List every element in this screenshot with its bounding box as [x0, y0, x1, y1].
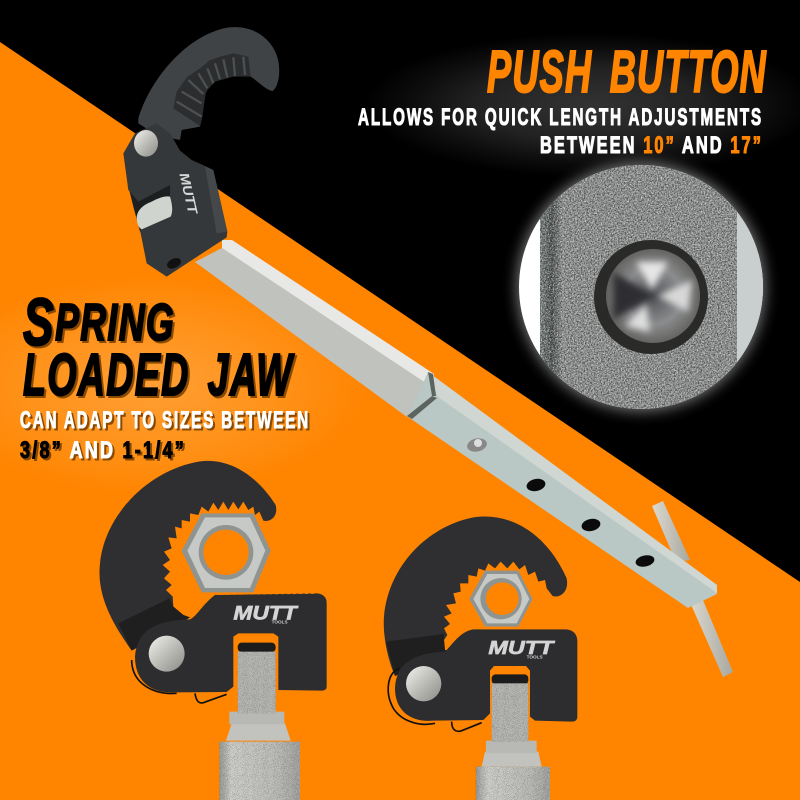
jaw teeth: [173, 53, 251, 126]
T handle pin, lower: [689, 593, 733, 677]
text: spring loaded jaw description: 3/8” AND 1-1/4”: [20, 437, 186, 464]
outer square tube: [407, 372, 717, 608]
serrated edge: [192, 160, 227, 233]
serrated top edge: [215, 593, 317, 594]
engraved brand: MUTT: [176, 171, 201, 217]
heading: spring loaded jaw: LOADED JAW: [23, 342, 294, 408]
spring wire: [132, 660, 227, 703]
hook jaw: [99, 461, 276, 651]
lower jaw shade: [386, 634, 453, 676]
brand logo: MUTT: [233, 603, 299, 624]
text: push button description: BETWEEN 10” AND 17”: [540, 132, 763, 159]
rivet: [149, 636, 185, 672]
rivet: [134, 130, 158, 157]
top wrench head: [123, 27, 279, 277]
adjustment holes: [466, 437, 655, 568]
left wrench with large nut: [99, 461, 327, 800]
square shaft: [238, 652, 276, 713]
panel: push button macro photo: [510, 160, 780, 420]
hex nut: [182, 513, 271, 592]
brand logo: MUTT: [488, 637, 555, 658]
square shaft: [492, 683, 528, 742]
heading: spring loaded jaw: S: [23, 285, 55, 360]
brand logo: TOOLS: [527, 655, 543, 660]
extendable tool shaft: [195, 240, 733, 677]
shaft tube: [219, 712, 300, 800]
wrench body: [395, 629, 577, 722]
brand logo: TOOLS: [272, 619, 288, 624]
rivet: [406, 666, 441, 701]
hex nut: [469, 571, 533, 627]
T handle pin, upper: [652, 501, 690, 562]
roller: [137, 196, 172, 229]
serrated top edge: [473, 626, 567, 631]
right wrench with small nut: [384, 516, 577, 800]
shaft tip: [238, 643, 276, 652]
roller socket shadow: [128, 180, 175, 232]
shaft tip: [492, 674, 528, 684]
text: spring loaded jaw description: [20, 407, 310, 464]
wrench body: [135, 593, 327, 692]
lower jaw shade: [118, 598, 190, 651]
text: push button description: [358, 104, 763, 159]
socket hole: [165, 256, 183, 271]
shaft tube: [476, 741, 550, 800]
heading: spring loaded jaw: PRING: [55, 294, 175, 352]
text glow behind push button heading: [365, 33, 800, 177]
jaw carrier body: [123, 123, 227, 277]
heading: spring loaded jaw: [23, 285, 294, 408]
icon: push button ball: [594, 240, 708, 354]
spring wire: [388, 668, 482, 731]
hook jaw: [138, 27, 279, 140]
inner square bar: [195, 240, 434, 417]
hook jaw: [384, 516, 567, 676]
text: spring loaded jaw description: CAN ADAPT TO SIZES BETWEEN: [20, 407, 310, 434]
